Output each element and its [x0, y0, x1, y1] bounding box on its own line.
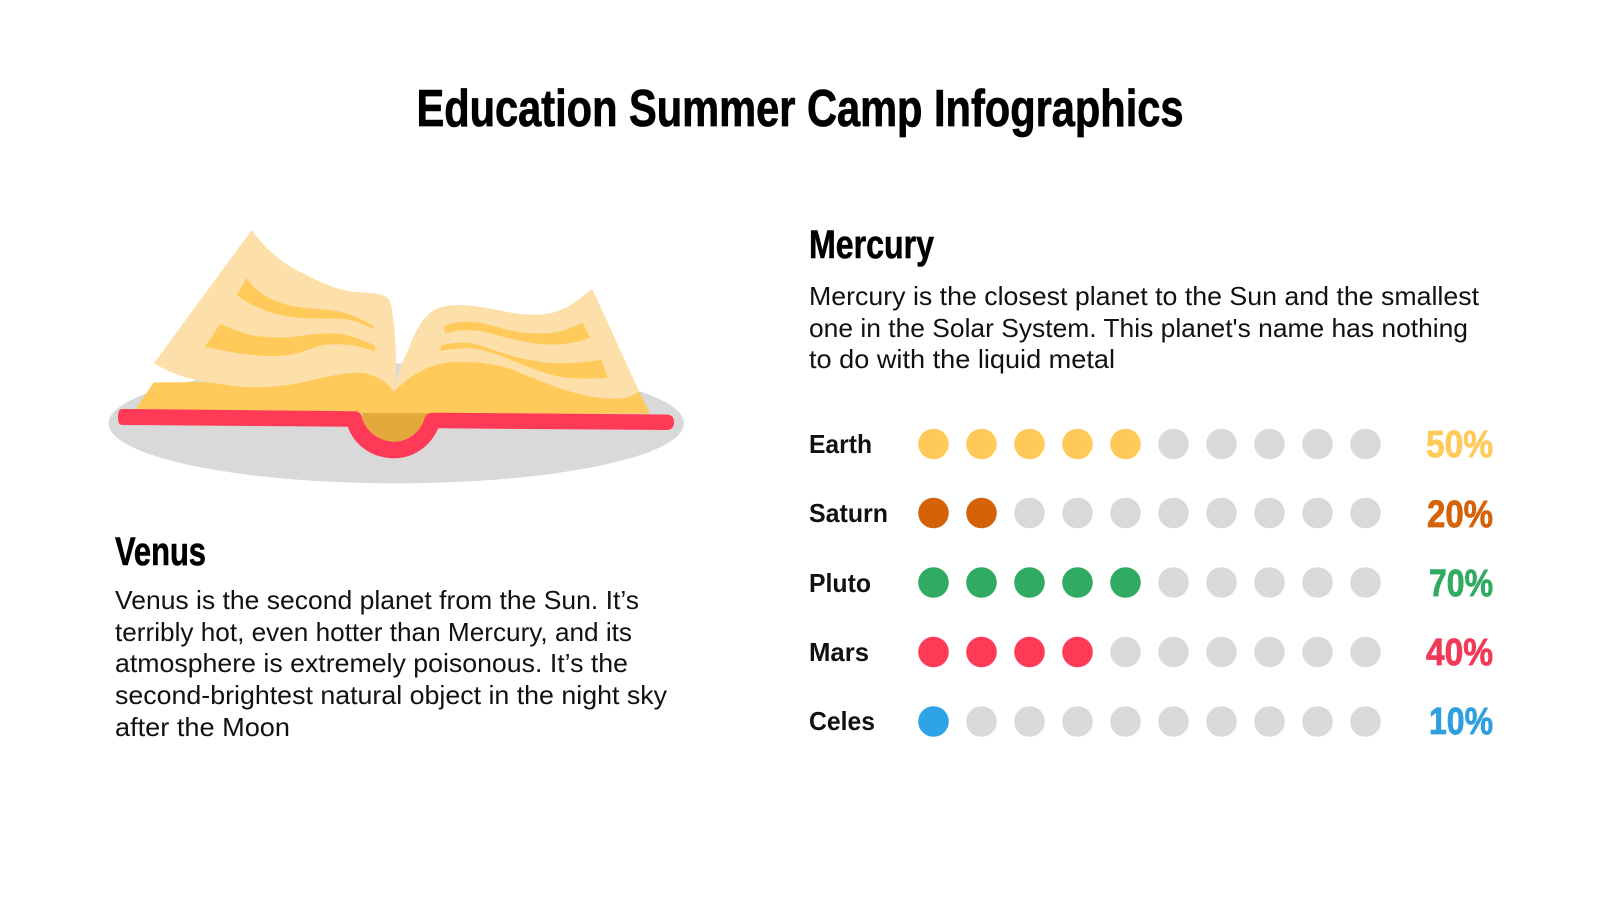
chart row: Pluto 70%: 70% — [1429, 563, 1493, 605]
chart row: Saturn 20%: Saturn — [809, 498, 888, 528]
heading: Mercury: Mercury — [809, 223, 935, 267]
text block: Venus description — [115, 585, 667, 742]
text block: Venus description: second-brightest natural object in the night sky — [115, 680, 667, 710]
title: Education Summer Camp Infographics — [416, 80, 1184, 138]
chart row: Celes 10% — [809, 701, 1493, 743]
text block: Venus description: terribly hot, even hotter than Mercury, and its — [115, 617, 632, 647]
text block: Venus description: atmosphere is extremely poisonous. It’s the — [115, 648, 628, 678]
illustration: open book — [109, 230, 684, 483]
text block: Venus description: after the Moon — [115, 712, 290, 742]
text block: Mercury description — [809, 281, 1480, 374]
chart row: Mars 40% — [809, 632, 1493, 674]
chart row: Saturn 20% — [809, 494, 1493, 536]
chart row: Mars 40%: 40% — [1426, 632, 1493, 674]
chart row: Saturn 20%: 20% — [1427, 494, 1493, 536]
chart row: Mars 40%: Mars — [809, 637, 869, 667]
chart row: Pluto 70% — [809, 563, 1493, 605]
text block: Venus description: Venus is the second planet from the Sun. It’s — [115, 585, 639, 615]
text block: Mercury description: Mercury is the closest planet to the Sun and the smallest — [809, 281, 1480, 311]
chart row: Celes 10%: Celes — [809, 706, 875, 736]
chart row: Earth 50% — [809, 424, 1493, 466]
text block: Mercury description: to do with the liquid metal — [809, 344, 1115, 374]
heading: Venus: Venus — [115, 530, 206, 574]
chart row: Earth 50%: Earth — [809, 429, 872, 459]
chart row: Earth 50%: 50% — [1426, 424, 1493, 466]
chart row: Pluto 70%: Pluto — [809, 568, 871, 598]
chart row: Celes 10%: 10% — [1429, 701, 1493, 743]
text block: Mercury description: one in the Solar System. This planet's name has nothing — [809, 313, 1468, 343]
